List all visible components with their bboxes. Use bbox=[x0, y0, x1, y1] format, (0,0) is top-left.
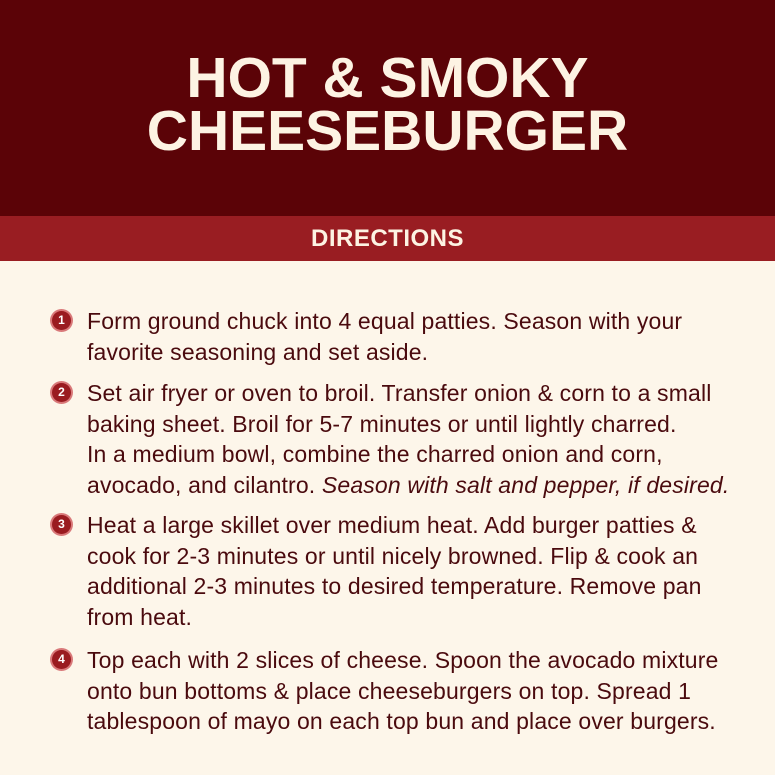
icon: number 1: 1 bbox=[58, 313, 65, 327]
text: step 2: avocado, and cilantro. Season with salt and pepper, if desired. bbox=[87, 472, 729, 498]
text: step 3: additional 2-3 minutes to desired temperature. Remove pan bbox=[87, 573, 702, 599]
text: step 1: Form ground chuck into 4 equal patties. Season with your bbox=[87, 308, 682, 334]
step 4 bbox=[50, 647, 718, 734]
text: step 1 bbox=[87, 308, 682, 365]
text: step 4 bbox=[87, 647, 718, 734]
text: step 2: Set air fryer or oven to broil. Transfer onion & corn to a small bbox=[87, 380, 711, 406]
step 2 bbox=[50, 380, 729, 498]
text: step 4: Top each with 2 slices of cheese. Spoon the avocado mixture bbox=[87, 647, 718, 673]
step 3 bbox=[50, 512, 702, 630]
text: step 3: from heat. bbox=[87, 604, 192, 630]
section heading: directions bbox=[0, 216, 775, 261]
text: step 2: In a medium bowl, combine the charred onion and corn, bbox=[87, 441, 663, 467]
text: step 2: baking sheet. Broil for 5-7 minutes or until lightly charred. bbox=[87, 410, 677, 436]
icon: number 4: 4 bbox=[58, 652, 65, 666]
step 1 bbox=[50, 308, 682, 365]
text: step 4: onto bun bottoms & place cheeseburgers on top. Spread 1 bbox=[87, 678, 691, 704]
icon: number 1 bbox=[52, 311, 71, 330]
icon: number 2 bbox=[52, 383, 71, 402]
header band bbox=[0, 0, 775, 216]
text: step 3: cook for 2-3 minutes or until nicely browned. Flip & cook an bbox=[87, 542, 698, 568]
title bbox=[147, 46, 628, 163]
section heading: directions: DIRECTIONS bbox=[311, 225, 464, 252]
icon: number 3 bbox=[52, 515, 71, 534]
text: step 1: favorite seasoning and set aside. bbox=[87, 338, 428, 364]
text: step 3: Heat a large skillet over medium heat. Add burger patties & bbox=[87, 512, 697, 538]
text: step 4: tablespoon of mayo on each top bun and place over burgers. bbox=[87, 708, 716, 734]
text: step 2 bbox=[87, 380, 729, 498]
icon: number 2: 2 bbox=[58, 385, 65, 399]
icon: number 4 bbox=[52, 650, 71, 669]
text: step 3 bbox=[87, 512, 702, 630]
icon: number 3: 3 bbox=[58, 517, 65, 531]
title: CHEESEBURGER bbox=[147, 99, 628, 163]
title: HOT & SMOKY bbox=[186, 46, 589, 110]
